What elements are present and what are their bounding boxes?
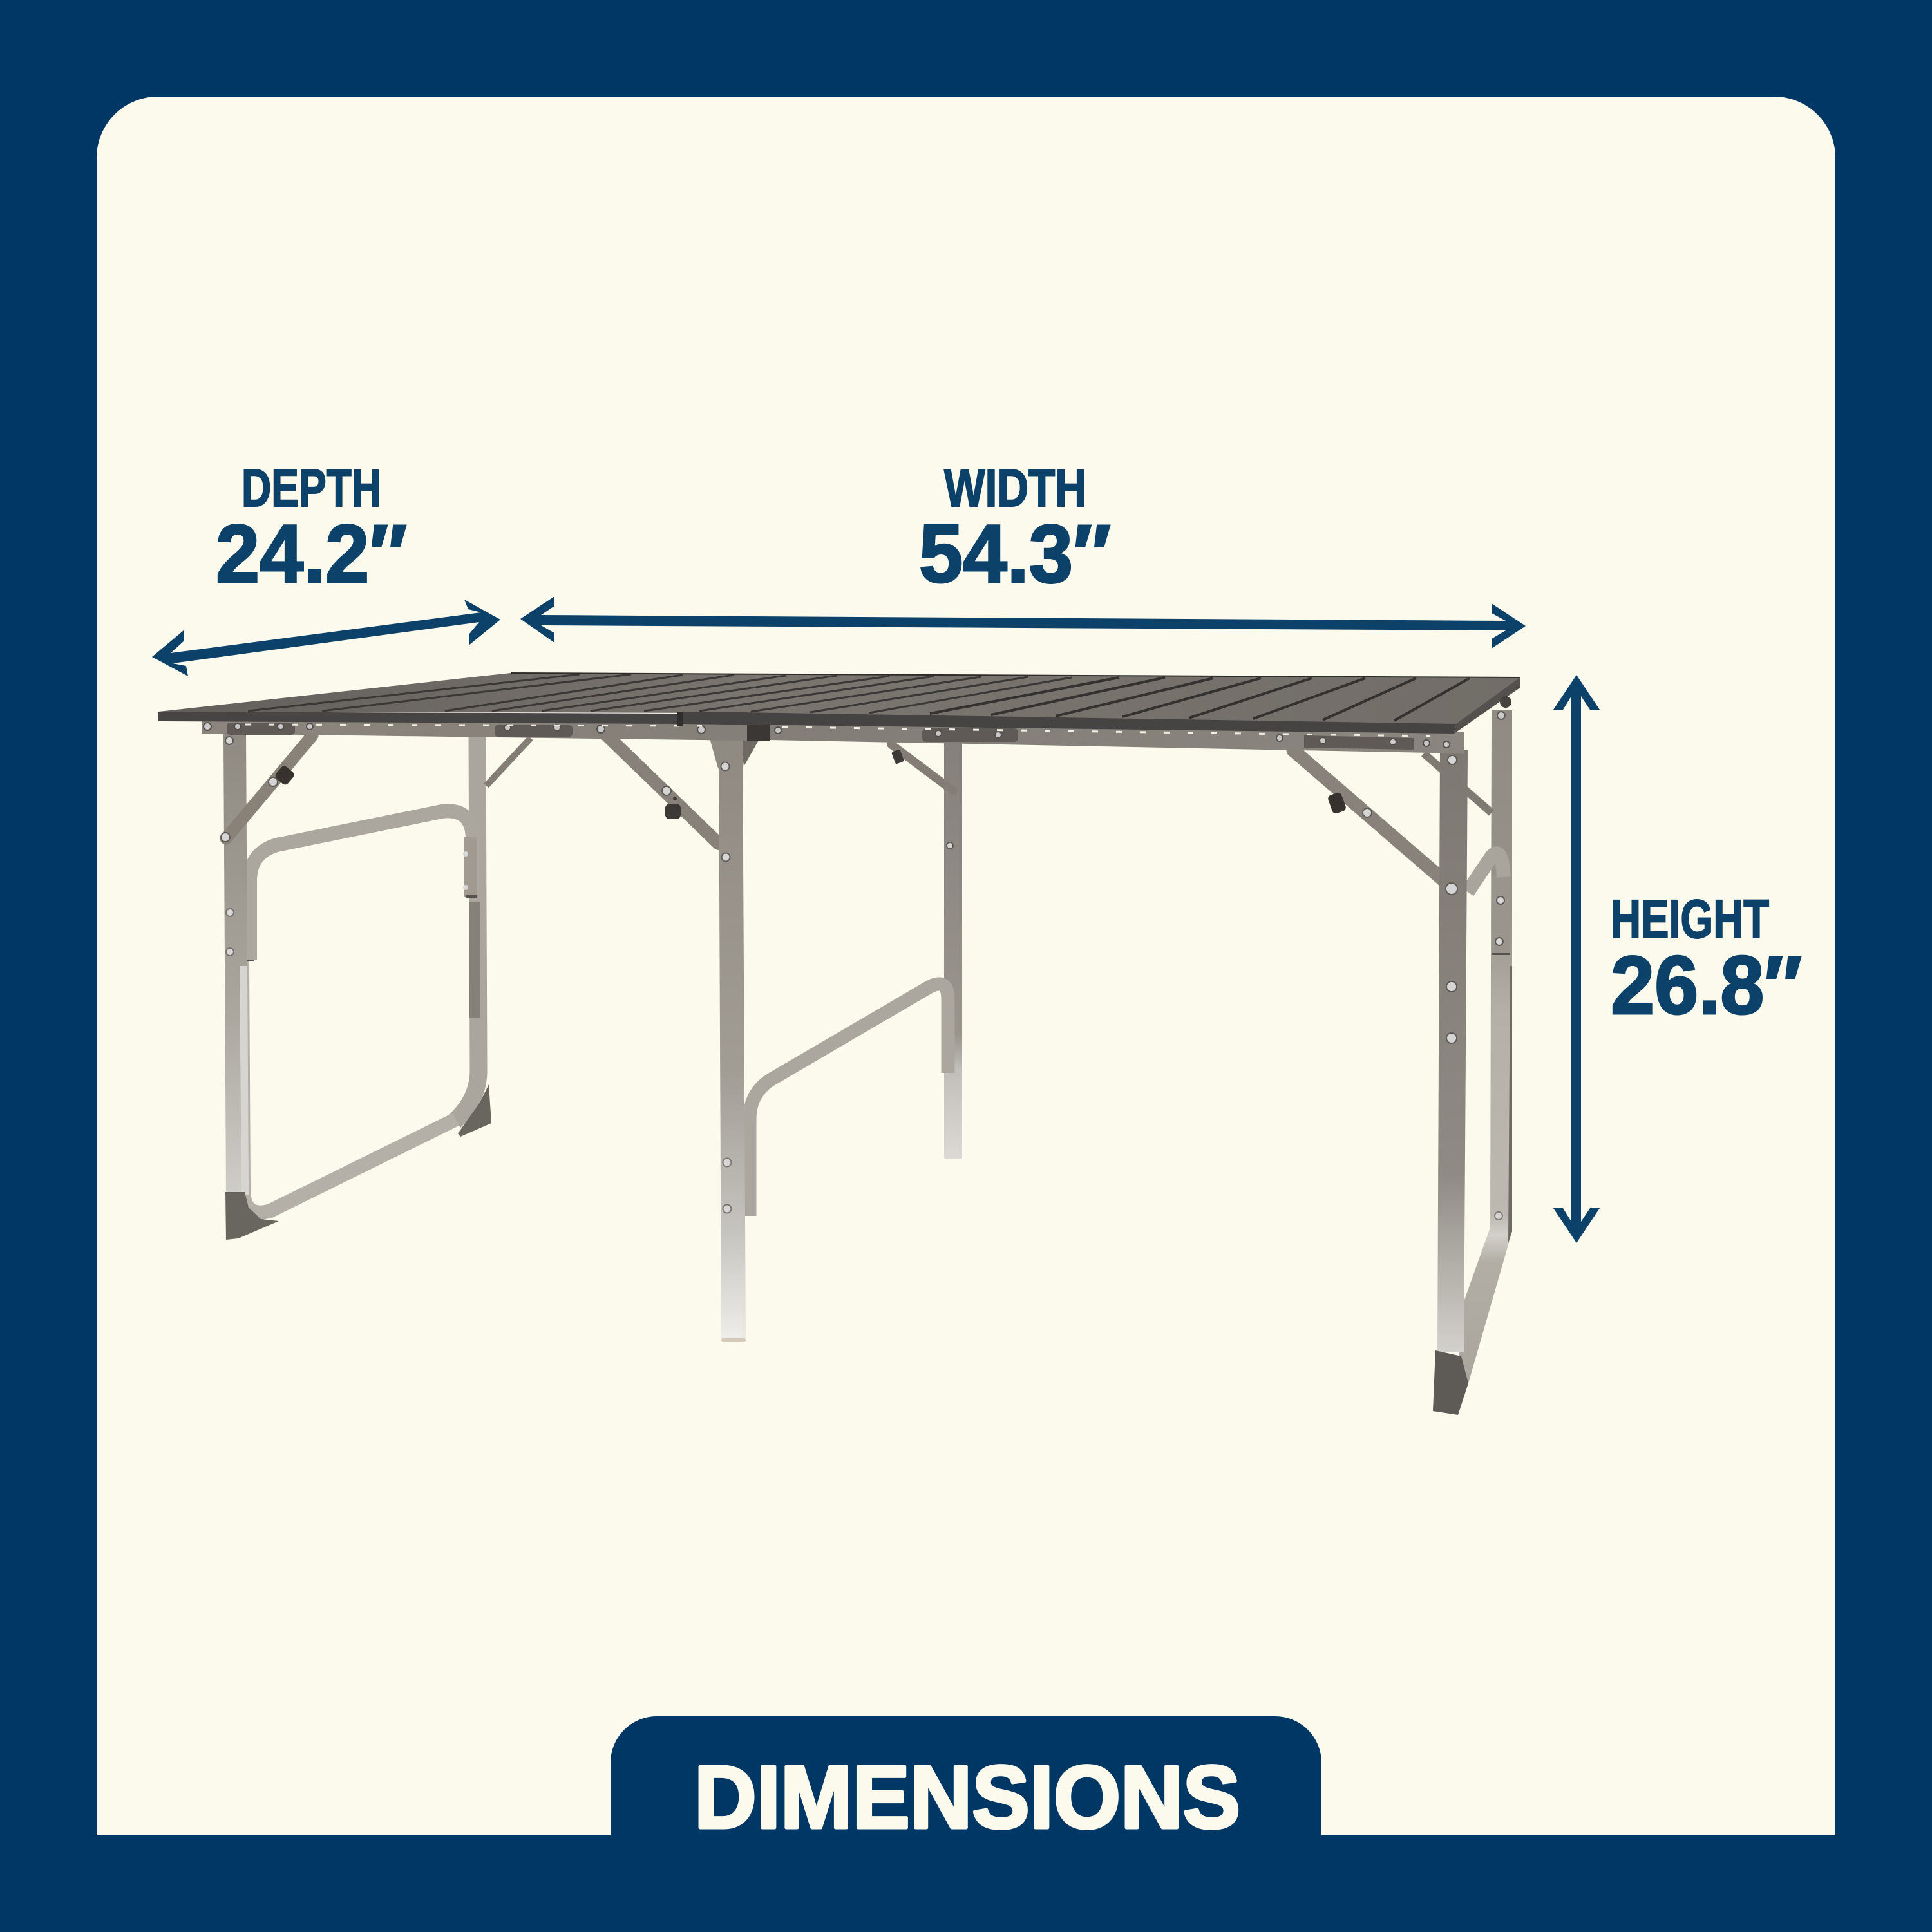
right leg handle tube — [1468, 853, 1504, 892]
middle back leg — [944, 741, 962, 1159]
depth heading: DEPTH — [242, 458, 381, 518]
table illustration — [158, 673, 1520, 1415]
back edge highlight — [511, 673, 1520, 677]
table centre latch — [677, 712, 683, 726]
foot: front right — [1433, 1350, 1468, 1415]
middle front leg — [708, 732, 746, 1342]
foot: left frame rear — [458, 1084, 491, 1137]
front right leg — [1437, 750, 1468, 1352]
width heading: WIDTH — [944, 458, 1086, 518]
foot: front left — [225, 1192, 279, 1240]
rear brace between right legs — [1424, 753, 1492, 813]
arrow: height — [1553, 675, 1600, 1243]
left frame: handle tube — [250, 811, 473, 960]
label: depth — [216, 458, 407, 600]
left frame: bottom tube — [242, 960, 456, 1213]
left frame: right post — [455, 737, 480, 1121]
arrow: depth — [152, 600, 500, 676]
table top surface — [158, 673, 1520, 726]
brace: middle back — [891, 744, 953, 791]
depth value: 24.2″ — [216, 508, 407, 600]
height heading: HEIGHT — [1611, 889, 1769, 949]
left frame: sleeve on right post — [463, 837, 477, 898]
under-rail — [202, 721, 1464, 753]
title tab — [611, 1716, 1321, 1847]
brace: front right — [1293, 750, 1454, 889]
width value: 54.3″ — [919, 508, 1111, 600]
back right leg with tapered frame — [1457, 710, 1512, 1383]
brace: middle right short — [741, 738, 760, 766]
height value: 26.8″ — [1611, 940, 1802, 1032]
title: DIMENSIONS — [694, 1748, 1240, 1847]
left sleeve end — [247, 960, 254, 961]
slat grooves: far left — [248, 674, 1072, 713]
brace: front left — [221, 735, 312, 842]
middle handle tube — [750, 984, 948, 1216]
table right side edge — [1454, 677, 1520, 734]
label: width — [919, 458, 1111, 600]
label: height — [1611, 889, 1802, 1032]
rail holes — [245, 724, 1430, 736]
brace: left rear — [486, 738, 531, 786]
table front edge — [158, 712, 1456, 734]
front left leg — [223, 734, 249, 1195]
rail plates — [227, 723, 1414, 750]
slat grooves — [930, 677, 1470, 721]
rail bolts — [204, 723, 1450, 748]
arrow: width — [520, 596, 1526, 649]
brace: middle front — [602, 731, 719, 844]
